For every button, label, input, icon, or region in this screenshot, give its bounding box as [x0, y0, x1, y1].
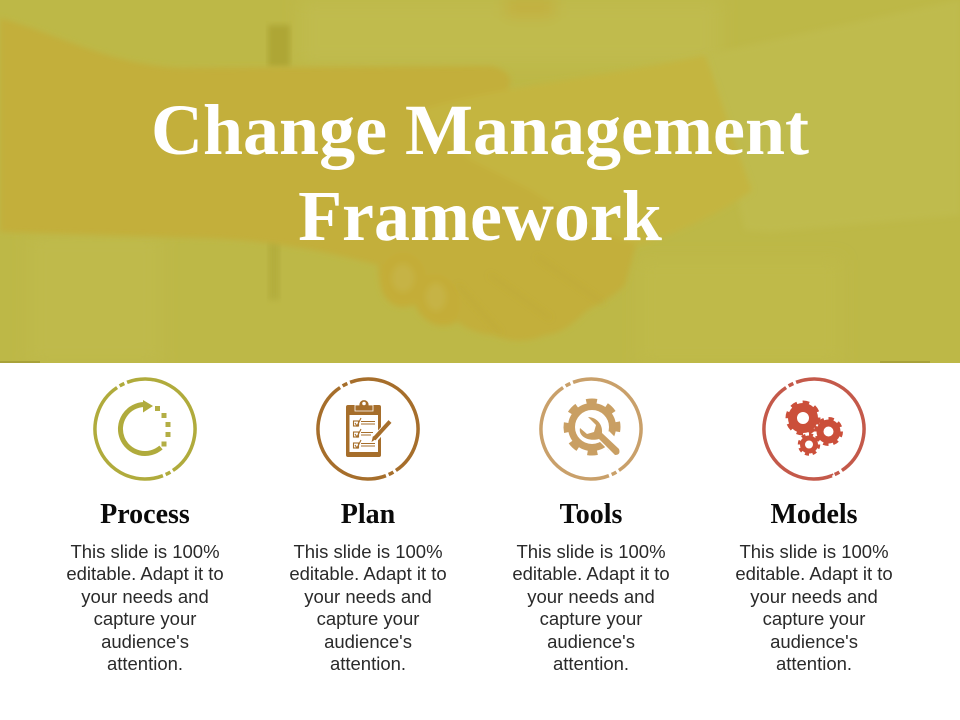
title: Change Management	[151, 90, 809, 170]
column: Tools: attention.	[553, 653, 629, 674]
column: Plan: editable. Adapt it to	[289, 563, 447, 584]
column: Process	[66, 499, 224, 674]
column: Models: Models	[770, 499, 858, 530]
left arm and hand	[0, 18, 640, 341]
column: Tools: capture your	[540, 608, 642, 629]
hero photo background: handshake with yellow overlay	[0, 0, 960, 363]
column: Tools: audience's	[547, 630, 635, 652]
right hand	[420, 55, 752, 245]
fingers	[380, 253, 426, 307]
column: Plan: Plan	[341, 499, 395, 530]
icons row	[93, 377, 866, 481]
title: Framework	[298, 176, 662, 256]
column: Models: capture your	[763, 608, 865, 629]
right sleeve	[705, 0, 960, 232]
column: Models: editable. Adapt it to	[735, 563, 893, 584]
column: Process: attention.	[107, 653, 183, 674]
title	[151, 90, 809, 256]
column: Models	[735, 499, 893, 674]
column: Models: This slide is 100%	[739, 540, 889, 562]
column: Tools: This slide is 100%	[516, 540, 666, 562]
column: Tools: editable. Adapt it to	[512, 563, 670, 584]
column: Process: This slide is 100%	[70, 540, 220, 562]
finger creases	[458, 257, 603, 333]
column: Process: capture your	[94, 608, 196, 629]
column: Plan: This slide is 100%	[293, 540, 443, 562]
column: Plan: capture your	[317, 608, 419, 629]
column: Models: your needs and	[750, 586, 878, 606]
column: Models: attention.	[776, 653, 852, 674]
icon: tools ring with gear and wrench	[526, 364, 656, 494]
column: Tools: Tools	[560, 499, 622, 530]
icon: models ring with three gears	[749, 364, 879, 494]
column: Plan	[289, 499, 447, 674]
column: Tools: your needs and	[527, 586, 655, 606]
column: Process: your needs and	[81, 586, 209, 606]
column: Plan: audience's	[324, 630, 412, 652]
column: Process: Process	[100, 499, 190, 530]
column: Plan: attention.	[330, 653, 406, 674]
column: Models: audience's	[770, 630, 858, 652]
icon: process ring with circular arrow	[80, 364, 210, 494]
column: Tools	[512, 499, 670, 674]
column: Plan: your needs and	[304, 586, 432, 606]
icon: plan ring with clipboard	[303, 364, 433, 494]
column: Process: editable. Adapt it to	[66, 563, 224, 584]
column: Process: audience's	[101, 630, 189, 652]
